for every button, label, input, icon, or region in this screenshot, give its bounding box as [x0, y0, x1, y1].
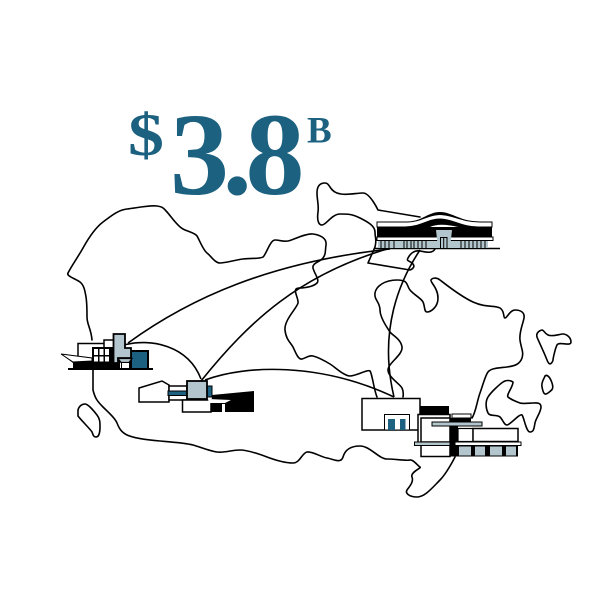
- building: northern terminal with wave roof: [375, 212, 500, 248]
- title: $3.8B: $: [128, 102, 164, 169]
- map outline of Canada: [68, 183, 571, 497]
- building: western complex: [61, 334, 153, 369]
- title: $3.8B: B: [307, 110, 332, 152]
- building: eastern complex: [362, 398, 521, 456]
- title: $3.8B: 3.8: [170, 89, 302, 220]
- connection arcs between buildings: [124, 249, 420, 397]
- building: prairie complex: [139, 381, 254, 412]
- entrance with blue doors: [384, 414, 410, 430]
- title: $3.8B: [128, 89, 332, 220]
